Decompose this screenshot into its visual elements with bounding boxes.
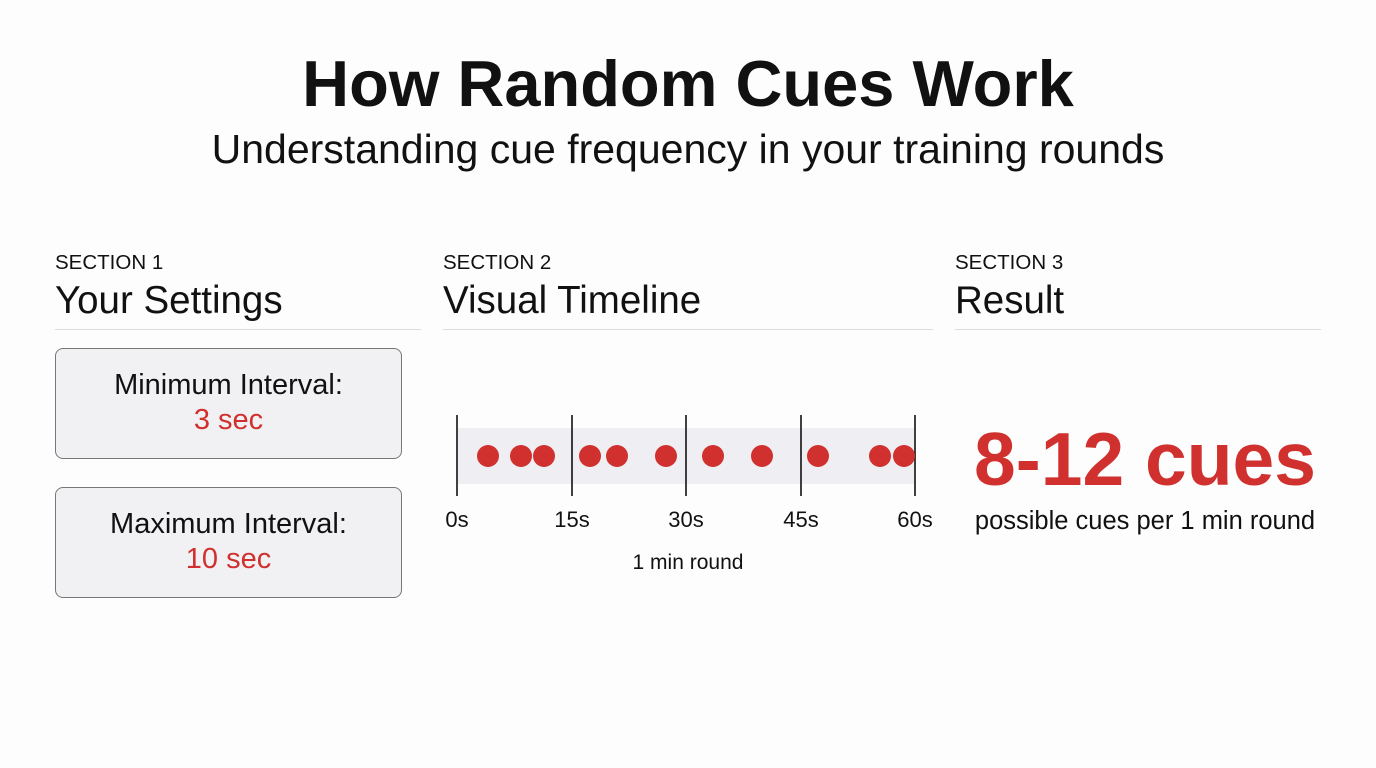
- card: minimum interval: Minimum Interval:: [114, 369, 343, 401]
- timeline chart: 15s: [554, 507, 590, 532]
- panel: timeline: [443, 251, 701, 322]
- timeline chart: 45s: [783, 507, 819, 532]
- heading: visual timeline: Visual Timeline: [443, 279, 701, 322]
- section 3 label: SECTION 3: [955, 251, 1063, 274]
- section 1 label: SECTION 1: [55, 251, 163, 274]
- timeline chart: 60s: [897, 507, 933, 532]
- panel: settings: [55, 251, 283, 322]
- card: maximum interval: [55, 487, 402, 598]
- subtitle: Understanding cue frequency in your training rounds: [212, 126, 1164, 172]
- timeline chart: [445, 415, 933, 574]
- timeline chart: 0s: [445, 507, 469, 532]
- panel: result: [955, 251, 1316, 535]
- heading: your settings: Your Settings: [55, 279, 283, 322]
- title: How Random Cues Work: [302, 47, 1074, 120]
- timeline chart: 30s: [668, 507, 704, 532]
- heading: result: Result: [955, 279, 1064, 322]
- card: maximum interval: 10 sec: [186, 543, 271, 575]
- result number: 8-12 cues: [974, 417, 1316, 501]
- timeline chart: 1 min round: [633, 551, 743, 574]
- card: maximum interval: Maximum Interval:: [110, 508, 347, 540]
- section 2 label: SECTION 2: [443, 251, 551, 274]
- card: minimum interval: [55, 348, 402, 459]
- card: minimum interval: 3 sec: [194, 404, 263, 436]
- result caption: possible cues per 1 min round: [975, 507, 1315, 535]
